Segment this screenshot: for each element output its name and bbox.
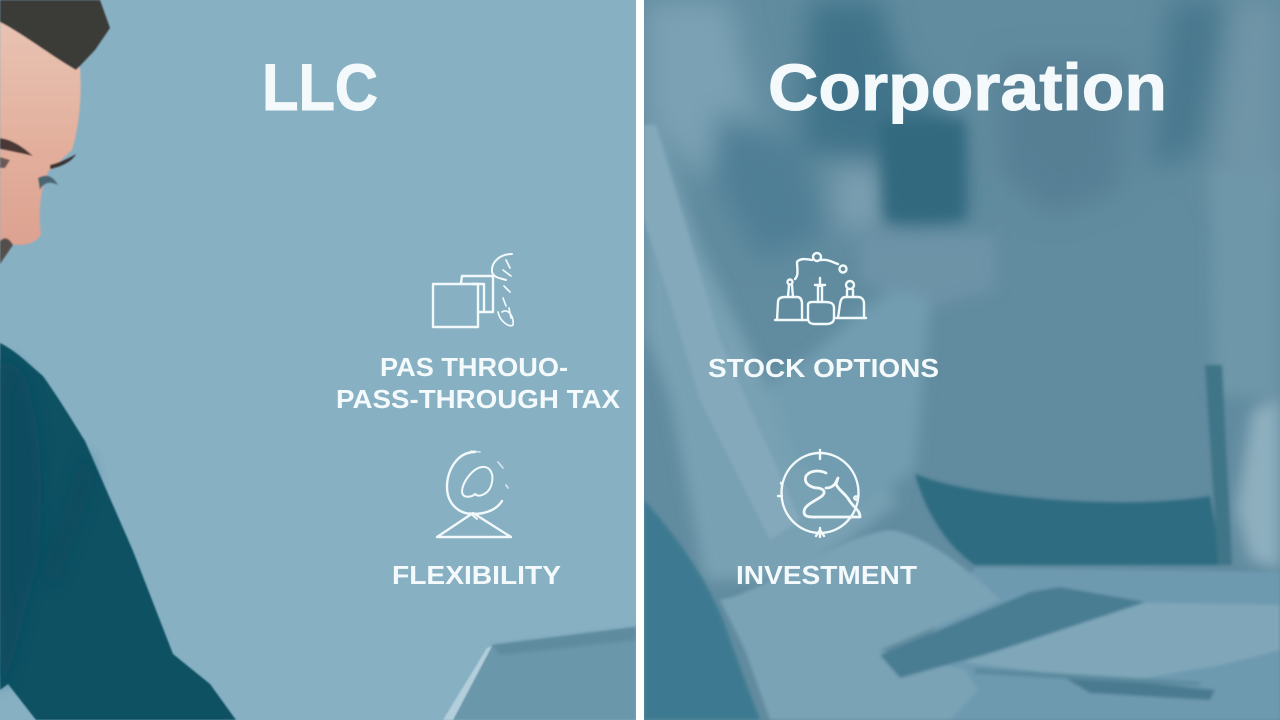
label: investment: INVESTMENT: [736, 560, 917, 590]
laptop: [443, 627, 636, 720]
man's sweater: [0, 343, 236, 720]
icon: investment emblem: [778, 450, 860, 537]
panel: LLC: [0, 0, 636, 720]
label: flexibility: FLEXIBILITY: [392, 560, 561, 590]
heading: LLC: LLC: [262, 50, 378, 124]
icon: flexibility globe: [437, 451, 511, 537]
icon: pass-through documents: [433, 254, 513, 327]
center divider: [636, 0, 644, 720]
man's face: [0, 0, 110, 264]
label: stock options: STOCK OPTIONS: [708, 353, 939, 383]
label: pass-through tax: PASS-THROUGH TAX: [336, 384, 621, 414]
blurred office photo: [644, 0, 1280, 720]
icon: stock options bottles: [775, 253, 866, 324]
photo: man at laptop: [0, 0, 236, 720]
heading: Corporation: Corporation: [768, 50, 1167, 124]
panel: Corporation: [644, 0, 1280, 720]
label: garbled pass-through heading: PAS THROUO-: [380, 352, 568, 382]
